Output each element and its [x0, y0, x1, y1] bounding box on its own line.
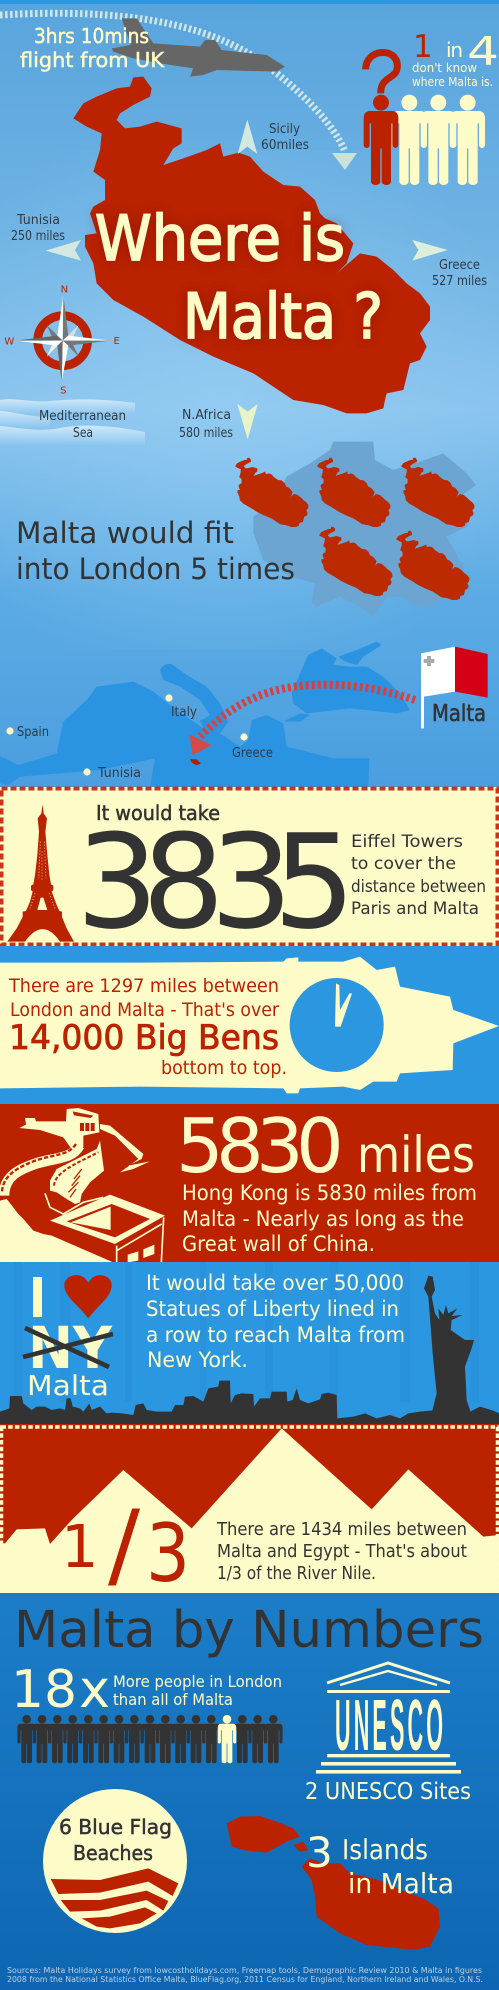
text: Statues of Liberty description: Statues of Liberty lined in — [146, 1297, 399, 1321]
text: distances to neighbours: 580 miles — [179, 426, 233, 441]
icon: I heart Malta — [23, 1275, 113, 1402]
icon: I heart Malta: Malta — [27, 1369, 109, 1402]
icon: blue flag beaches circle — [43, 1789, 187, 1933]
icon: city skyline — [0, 1381, 499, 1425]
icon: UNESCO temple logo: UNESCO — [335, 1686, 443, 1766]
text: Hong Kong description: Great wall of China. — [182, 1232, 375, 1256]
text: Hong Kong description: Malta - Nearly as long as the — [182, 1207, 464, 1231]
text: Big Ben comparison: There are 1297 miles between — [8, 975, 279, 997]
text: River Nile description: Malta and Egypt - That's about — [217, 1541, 467, 1562]
map: Mediterranean sea — [0, 642, 410, 787]
text: Mediterranean Sea — [39, 409, 126, 441]
title: Where is — [95, 202, 345, 275]
text: Malta would fit into London: into London 5 times — [16, 552, 295, 586]
text: distances to neighbours: Tunisia — [16, 213, 60, 228]
icon: Great Wall — [0, 1108, 165, 1262]
icon: UNESCO temple logo — [316, 1663, 461, 1774]
text: flight time — [20, 24, 165, 72]
stat: 18x — [11, 1660, 282, 1720]
icon: Eiffel Tower — [7, 804, 74, 942]
text: Big Ben comparison: 14,000 Big Bens — [9, 1018, 279, 1058]
map labels: Spain — [17, 725, 49, 740]
stat: 18x: than all of Malta — [113, 1690, 233, 1709]
stat: one third: / — [108, 1491, 140, 1600]
text: Big Ben comparison — [8, 975, 287, 1079]
text: Mediterranean Sea: Sea — [73, 426, 93, 441]
map: Malta main island — [73, 77, 430, 413]
title: Malta ? — [183, 280, 383, 353]
text: Eiffel Towers description: Paris and Malta — [351, 899, 479, 919]
text: Eiffel Towers description: to cover the — [351, 854, 456, 874]
map labels: Greece — [232, 746, 273, 761]
text: distances to neighbours: N.Africa — [182, 408, 231, 423]
icon: compass rose: E — [114, 336, 120, 347]
text: Mediterranean Sea: Mediterranean — [39, 409, 126, 424]
text: 3 Islands in Malta: 3 — [306, 1828, 333, 1877]
text: flight time: flight from UK — [20, 48, 165, 72]
panel: Statue of Liberty — [0, 1262, 499, 1425]
icon: people, one in four — [364, 52, 485, 185]
arrows: compass directions to neighbours — [46, 119, 448, 439]
stat: 5830 miles: 5830 — [176, 1102, 344, 1190]
arrow: dotted flight path — [0, 13, 357, 170]
icon: compass rose: N — [61, 284, 68, 295]
text: Big Ben comparison: bottom to top. — [161, 1057, 287, 1079]
title — [95, 202, 383, 353]
panel: Malta by Numbers — [0, 1593, 499, 1990]
text: Eiffel Towers description: Eiffel Towers — [351, 832, 463, 852]
text: Statues of Liberty description — [146, 1271, 405, 1372]
icon: compass rose: S — [60, 385, 67, 396]
map: Maltese islands — [227, 1816, 440, 1950]
map labels: Tunisia — [97, 766, 141, 781]
panel: Big Ben — [0, 946, 499, 1104]
stat: 5830 miles — [176, 1102, 475, 1190]
text: Hong Kong description: Hong Kong is 5830 miles from — [182, 1181, 477, 1205]
arrow: red route to Malta — [189, 685, 415, 765]
stat: 18x: x — [79, 1660, 110, 1720]
text: 3 Islands in Malta: Islands — [342, 1833, 428, 1866]
decoration: sea waves — [0, 399, 145, 446]
text: Hong Kong description — [182, 1181, 477, 1256]
text: Statues of Liberty description: New York. — [147, 1348, 248, 1372]
text: one in four stat: 1 — [413, 29, 433, 65]
text: one in four stat: don't know — [412, 61, 477, 75]
icon: blue flag beaches circle: 6 Blue Flag — [59, 1815, 172, 1839]
icon: Big Ben clock tower — [0, 957, 499, 1093]
stat: one third: 3 — [146, 1507, 190, 1600]
stat: 18x: More people in London — [113, 1672, 282, 1691]
text: It would take: It would take — [96, 801, 220, 825]
text: 3 Islands in Malta: in Malta — [348, 1867, 454, 1900]
icon: Maltese flag — [421, 647, 488, 728]
text: Big Ben comparison: London and Malta - That's over — [10, 999, 279, 1021]
text: sources — [7, 1966, 483, 1984]
text: Malta would fit into London: Malta would fit — [16, 516, 234, 550]
text: distances to neighbours — [11, 122, 487, 441]
icon: aeroplane — [112, 18, 285, 77]
text: flight time: 3hrs 10mins — [34, 24, 149, 48]
map labels — [6, 694, 273, 781]
icon: compass rose — [4, 284, 120, 396]
text: distances to neighbours: 250 miles — [11, 229, 65, 244]
icon: I heart Malta: NY — [28, 1314, 113, 1382]
stat: 3835: 3835 — [76, 806, 356, 958]
stat: one third — [61, 1491, 190, 1600]
text: Eiffel Towers description: distance between — [351, 877, 486, 897]
text: Malta flag label: Malta — [432, 701, 486, 727]
text: one in four stat — [412, 29, 499, 89]
text: Eiffel Towers description — [351, 832, 486, 919]
text: Statues of Liberty description: a row to reach Malta from — [146, 1323, 405, 1347]
text: River Nile description: 1/3 of the River Nile. — [217, 1563, 376, 1584]
stat: 5830 miles: miles — [357, 1126, 475, 1184]
panel: where is Malta map section — [0, 0, 499, 790]
panel: Eiffel Towers — [0, 787, 499, 958]
stat: 18x: 18 — [11, 1660, 77, 1720]
text: River Nile description: There are 1434 miles between — [216, 1519, 467, 1540]
icon: row of people — [17, 1715, 283, 1763]
panel: River Nile — [0, 1424, 499, 1600]
text: distances to neighbours: 60miles — [261, 138, 309, 153]
text: sources: Sources: Malta Holidays survey from lowcostholidays.com, Freemap tools, Demographic Review 2010 & Malta in figures — [7, 1966, 482, 1975]
text: 3 Islands in Malta — [306, 1828, 454, 1900]
text: one in four stat: 4 — [467, 30, 499, 75]
text: distances to neighbours: Greece — [439, 258, 480, 273]
icon: compass rose: W — [4, 336, 14, 347]
text: distances to neighbours: 527 miles — [432, 274, 487, 289]
icon: mountains — [0, 1428, 499, 1593]
icon: blue flag beaches circle: Beaches — [73, 1841, 153, 1865]
text: distances to neighbours: Sicily — [269, 122, 300, 137]
text: River Nile description — [216, 1519, 467, 1584]
text: 2 UNESCO Sites: 2 UNESCO Sites — [305, 1779, 471, 1805]
heading: Malta by Numbers — [14, 1601, 484, 1660]
text: Statues of Liberty description: It would take over 50,000 — [146, 1271, 404, 1295]
map: London with five Maltas — [235, 442, 476, 617]
map labels: Italy — [171, 705, 197, 720]
text: one in four stat: in — [446, 38, 463, 62]
icon: Statue of Liberty — [424, 1276, 474, 1420]
stat: one third: 1 — [61, 1512, 99, 1581]
panel: Great Wall of China — [0, 1102, 499, 1262]
text: Malta would fit into London — [16, 516, 295, 586]
text: sources: 2008 from the National Statistics Office Malta, BlueFlag.org, 2011 Census for England, Northern Ireland and Wales, O.N.S. — [7, 1975, 483, 1984]
